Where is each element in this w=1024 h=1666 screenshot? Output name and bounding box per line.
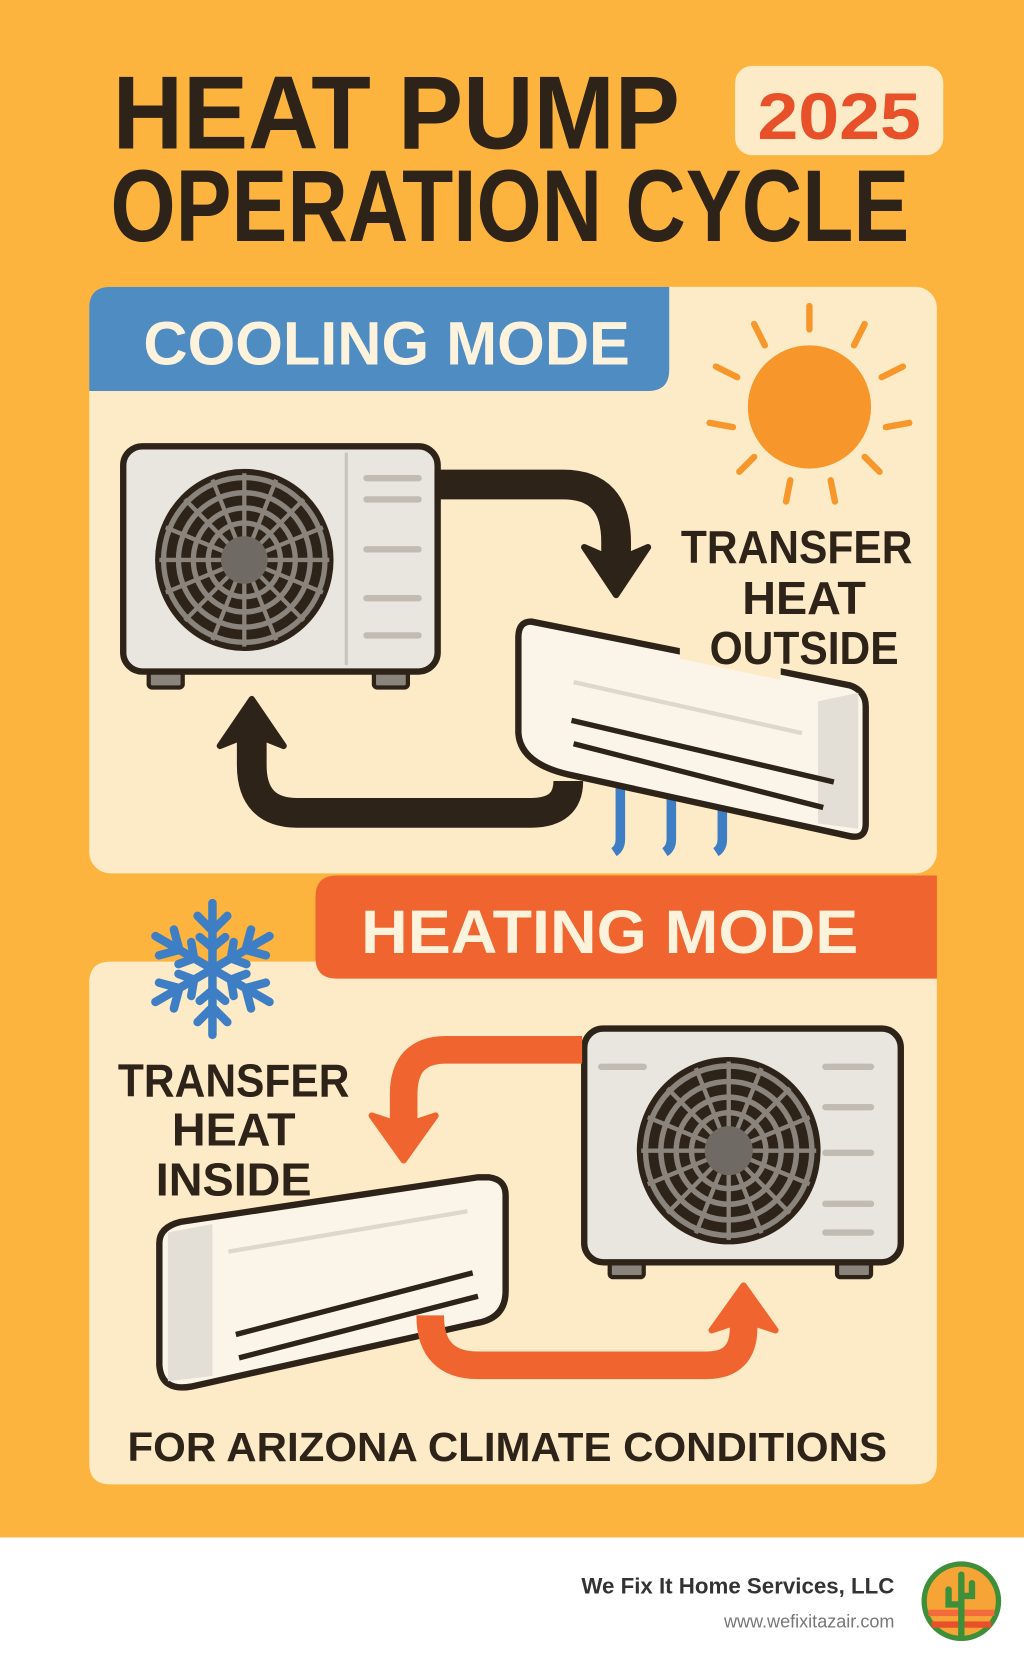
caption: FOR ARIZONA CLIMATE CONDITIONS: [127, 1424, 887, 1470]
panel: cooling mode: [89, 287, 937, 873]
arrow: heat into indoor: [372, 1050, 582, 1160]
heading: heating mode: HEATING MODE: [361, 898, 858, 967]
year badge: [735, 66, 943, 155]
label: transfer heat inside: TRANSFER: [118, 1054, 349, 1107]
label: transfer heat outside: OUTSIDE: [710, 622, 899, 674]
label: transfer heat inside: HEAT: [172, 1103, 296, 1155]
heading: cooling mode: COOLING MODE: [143, 309, 630, 378]
label: transfer heat inside: INSIDE: [156, 1153, 312, 1205]
indoor unit: [518, 622, 866, 837]
footer: [0, 1537, 1024, 1666]
icon: logo: [924, 1564, 999, 1638]
outdoor unit: [123, 446, 438, 687]
arrow: return to outdoor: [220, 699, 568, 813]
title: HEAT PUMP: [113, 56, 680, 172]
website: www.wefixitazair.com: [723, 1612, 894, 1632]
title: [110, 56, 909, 263]
arrow: to indoor: [436, 484, 648, 595]
label: transfer heat outside: HEAT: [742, 572, 866, 624]
outdoor unit: [584, 1028, 901, 1277]
icon: sun: [710, 306, 909, 502]
year badge: 2025: [757, 79, 921, 153]
indoor unit: [159, 1177, 506, 1387]
arrow: back to outdoor: [430, 1286, 775, 1365]
panel: heating mode: [89, 876, 937, 1484]
heading: heating mode: [315, 876, 937, 979]
label: transfer heat inside: [118, 1054, 349, 1205]
label: transfer heat outside: TRANSFER: [681, 521, 912, 573]
label: transfer heat outside: [681, 521, 912, 674]
cold air lines: [614, 786, 722, 852]
company name: We Fix It Home Services, LLC: [581, 1574, 894, 1599]
heading: cooling mode: [89, 287, 669, 391]
icon: snowflake: [148, 903, 277, 1035]
